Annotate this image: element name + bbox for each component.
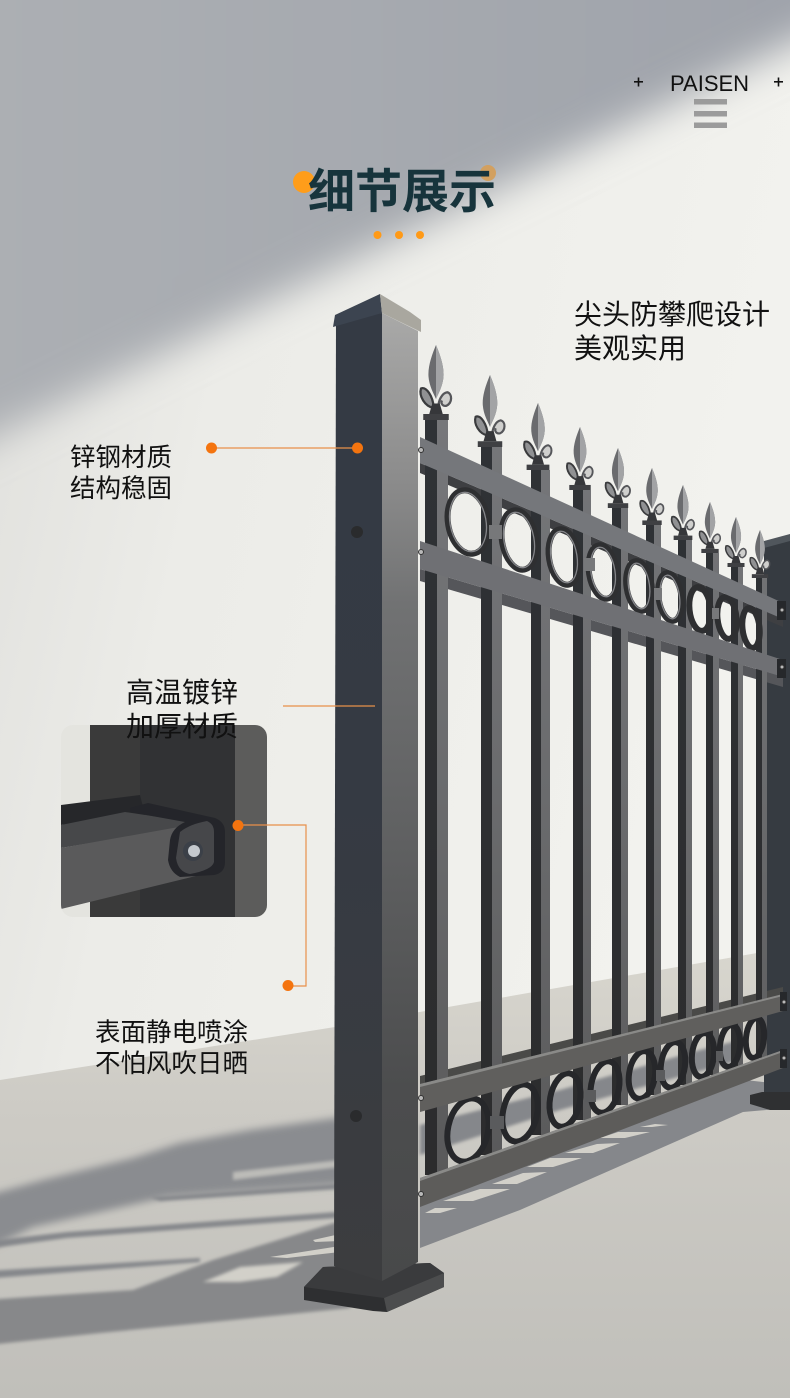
callout: galvanized: 加厚材质 bbox=[126, 711, 238, 742]
rail end brackets bbox=[777, 601, 787, 1068]
lower ring row bbox=[442, 1017, 766, 1165]
finials bbox=[421, 345, 770, 578]
leader line: coating bbox=[232, 820, 306, 991]
upper ring row bbox=[443, 487, 762, 649]
title text: 细节展示 bbox=[308, 165, 496, 218]
post base plate bbox=[304, 1263, 444, 1312]
ring clamps bbox=[489, 525, 723, 1129]
horizontal rails bbox=[418, 437, 787, 1207]
thin shadow bands bbox=[0, 1211, 350, 1251]
detail inset: bolted rail joint bbox=[61, 725, 267, 917]
fence pickets bbox=[421, 345, 770, 1175]
post left face bbox=[334, 313, 382, 1281]
callout: coating: 不怕风吹日晒 bbox=[95, 1050, 248, 1078]
brand header bbox=[634, 71, 783, 128]
post right face bbox=[382, 313, 418, 1281]
floor shadows bbox=[0, 1040, 790, 1347]
rail bolts bbox=[418, 448, 786, 1196]
callout: spear tips: 尖头防攀爬设计 bbox=[574, 299, 770, 330]
upper rail 2 bbox=[420, 541, 783, 677]
leader line: zinc steel bbox=[206, 442, 363, 454]
concrete floor bbox=[0, 947, 790, 1398]
callout: galvanized: 高温镀锌 bbox=[126, 677, 238, 708]
lower shadow mass bbox=[0, 1218, 350, 1347]
callout: spear tips: 美观实用 bbox=[574, 333, 686, 364]
lower rail 3 bbox=[420, 994, 783, 1112]
menu bars icon bbox=[694, 99, 727, 128]
upper shadow mass bbox=[0, 1116, 350, 1258]
plus marks bbox=[634, 78, 783, 86]
lower rail 4 bbox=[420, 1050, 783, 1207]
diagonal wall shadow bbox=[0, 0, 790, 472]
brand name: PAISEN bbox=[670, 71, 749, 96]
callout: coating: 表面静电喷涂 bbox=[95, 1019, 248, 1047]
leader line: galvanized bbox=[283, 705, 375, 707]
post bolt holes bbox=[350, 526, 363, 1122]
post cap bbox=[333, 294, 421, 332]
title bbox=[293, 165, 496, 239]
wall background bbox=[0, 0, 790, 1100]
upper rail 1 bbox=[420, 437, 783, 619]
callout: zinc steel: 锌钢材质 bbox=[70, 444, 172, 472]
callout: zinc steel: 结构稳固 bbox=[70, 475, 172, 503]
floor sunlit slits bbox=[203, 1124, 668, 1282]
main post bbox=[304, 294, 444, 1312]
right end post bbox=[750, 534, 790, 1110]
picket bars bbox=[425, 420, 767, 1175]
rail undersides bbox=[420, 463, 783, 1086]
three dots bbox=[374, 231, 424, 239]
shadow behind fence bbox=[420, 1080, 790, 1248]
title accent dots bbox=[293, 171, 315, 193]
